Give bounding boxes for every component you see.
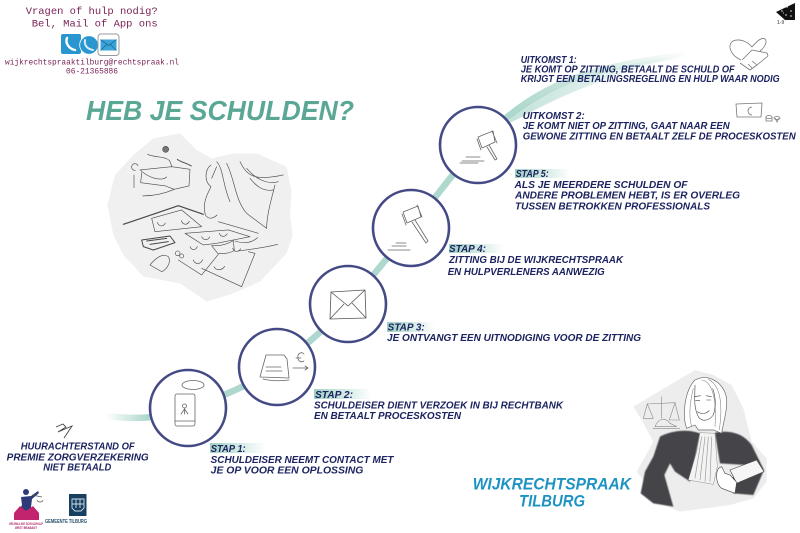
outcome 2 text: UITKOMST 2: bbox=[523, 111, 585, 122]
outcome 2 text bbox=[523, 111, 797, 142]
contact details: 06-21365886 bbox=[66, 69, 118, 77]
label: Wijkrechtspraak Tilburg: TILBURG bbox=[519, 492, 585, 510]
jabot bbox=[688, 433, 717, 484]
illustration: woman with debts bbox=[107, 133, 293, 302]
start text: HUURACHTERSTAND OF bbox=[21, 442, 136, 453]
step 5 text: ALS JE MEERDERE SCHULDEN OF bbox=[513, 180, 689, 191]
head and hair bbox=[684, 378, 727, 433]
contact question bbox=[26, 6, 158, 31]
contact question: Bel, Mail of App ons bbox=[32, 19, 158, 31]
scales of justice bbox=[643, 397, 680, 428]
step 3 text: JE ONTVANGT EEN UITNODIGING VOOR DE ZITTING bbox=[387, 333, 641, 344]
step 2 text: EN BETAALT PROCESKOSTEN bbox=[314, 411, 462, 422]
path ribbon bbox=[106, 54, 690, 418]
step 3 text: STAP 3: bbox=[388, 323, 425, 334]
start text bbox=[7, 442, 149, 474]
contact block bbox=[5, 6, 179, 77]
logo: Vrijwillige schuldhulp: VRIJWILLIGE SCHULDHULP bbox=[9, 522, 43, 526]
step 5 circle: gavel bbox=[440, 107, 516, 183]
step 1 text: SCHULDEISER NEEMT CONTACT MET bbox=[211, 455, 394, 466]
label: Wijkrechtspraak Tilburg: WIJKRECHTSPRAAK bbox=[473, 476, 632, 494]
logo: Gemeente Tilburg: GEMEENTE TILBURG bbox=[45, 519, 87, 525]
contact details bbox=[5, 60, 179, 77]
step 5 text bbox=[513, 169, 740, 212]
step 2 text bbox=[314, 389, 564, 422]
step 1 text: STAP 1: bbox=[211, 444, 246, 455]
step 5 text: TUSSEN BETROKKEN PROFESSIONALS bbox=[515, 201, 710, 212]
step 1 circle: phone bbox=[150, 370, 226, 446]
step 2 text: STAP 2: bbox=[315, 390, 353, 401]
step 3 text bbox=[387, 322, 641, 344]
label: Wijkrechtspraak Tilburg bbox=[473, 476, 632, 510]
outcome 1 text bbox=[521, 55, 780, 85]
step 4 text: ZITTING BIJ DE WIJKRECHTSPRAAK bbox=[448, 255, 624, 266]
outcome 1 text: UITKOMST 1: bbox=[521, 55, 577, 66]
step 4 text bbox=[448, 244, 624, 278]
book and hand bbox=[730, 460, 764, 483]
outcome 2 text: GEWONE ZITTING EN BETAALT ZELF DE PROCESKOSTEN bbox=[523, 132, 797, 142]
icon: banknote and coins bbox=[736, 103, 780, 122]
icon: black corner triangle: 1-9 bbox=[777, 20, 784, 26]
logo: Vrijwillige schuldhulp bbox=[9, 489, 43, 530]
outcome 1 text: KRIJGT EEN BETALINGSREGELING EN HULP WAAR NODIG bbox=[521, 74, 780, 85]
outcome 1 text: JE KOMT OP ZITTING, BETAALT DE SCHULD OF bbox=[521, 64, 736, 76]
step 2 text: SCHULDEISER DIENT VERZOEK IN BIJ RECHTBANK bbox=[314, 401, 564, 412]
contact details: wijkrechtspraaktilburg@rechtspraak.nl bbox=[5, 60, 179, 68]
step 2 circle: document and euro bbox=[239, 329, 315, 405]
logo: Gemeente Tilburg bbox=[45, 494, 87, 525]
step 5 text: STAP 5: bbox=[516, 169, 549, 180]
icon: signature bbox=[56, 424, 72, 438]
step 1 text: JE OP VOOR EEN OPLOSSING bbox=[211, 465, 364, 476]
contact question: Vragen of hulp nodig? bbox=[26, 6, 158, 18]
step 1 text bbox=[210, 443, 394, 476]
step 5 text: ANDERE PROBLEMEN HEBT, IS ER OVERLEG bbox=[514, 191, 740, 202]
outcome 2 text: JE KOMT NIET OP ZITTING, GAAT NAAR EEN bbox=[523, 121, 731, 132]
illustration: judge bbox=[633, 370, 767, 512]
title: HEB JE SCHULDEN? bbox=[86, 95, 354, 126]
step 3 circle: envelope bbox=[310, 266, 386, 342]
step 4 circle: gavel bbox=[373, 190, 449, 266]
icon: black corner triangle bbox=[776, 3, 795, 26]
start text: PREMIE ZORGVERZEKERING bbox=[7, 452, 149, 463]
icons: phone, call, mail bbox=[61, 34, 119, 56]
icon: heart handshake bbox=[730, 38, 768, 70]
robe bbox=[641, 431, 700, 507]
step 4 text: EN HULPVERLENERS AANWEZIG bbox=[448, 267, 605, 278]
start: arrears bbox=[7, 424, 149, 474]
logo: Vrijwillige schuldhulp: WEST BRABANT bbox=[15, 526, 38, 530]
step 4 text: STAP 4: bbox=[449, 244, 486, 255]
start text: NIET BETAALD bbox=[43, 463, 111, 474]
